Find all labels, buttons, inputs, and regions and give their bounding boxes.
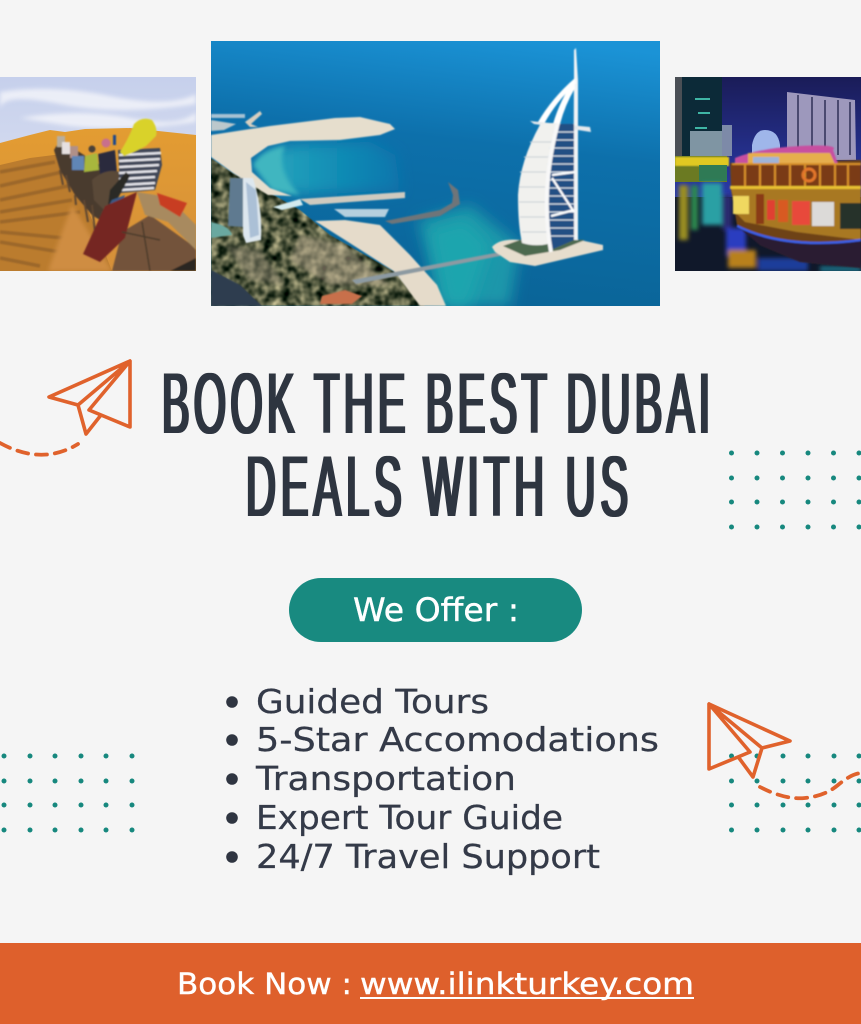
list of offers: Guided Tours [256, 682, 489, 721]
heading pill: We Offer [289, 578, 582, 642]
photo: illuminated dhow at night in Dubai Creek [675, 77, 861, 272]
call to action text [177, 967, 694, 1001]
list of offers: 24/7 Travel Support [256, 837, 600, 876]
list of offers: Transportation [255, 759, 516, 798]
photo: camel caravan in the desert [0, 77, 196, 271]
list of offers: 5-Star Accomodations [256, 720, 659, 759]
decoration: dot grid top right [729, 450, 861, 530]
decoration: dot grid bottom left [2, 754, 134, 832]
list of offers: Expert Tour Guide [256, 798, 563, 837]
footer bar [0, 943, 861, 1024]
title: DEALS WITH US [246, 440, 628, 535]
list of offers [226, 682, 659, 876]
call to action text: Book Now : [177, 967, 352, 1001]
decoration: paper plane bottom right [709, 704, 790, 777]
mottled land [211, 158, 425, 306]
decoration: dashed flight path left [0, 443, 78, 455]
decoration: paper plane top left [49, 361, 130, 434]
title [162, 357, 710, 535]
decoration: dashed flight path right [760, 773, 861, 798]
call to action text: www.ilinkturkey.com [360, 967, 694, 1001]
decoration: dot grid bottom right [729, 754, 861, 832]
title: BOOK THE BEST DUBAI [162, 357, 710, 452]
heading pill: We Offer: We Offer : [353, 591, 519, 629]
photo: Burj Al Arab aerial view [211, 41, 660, 306]
